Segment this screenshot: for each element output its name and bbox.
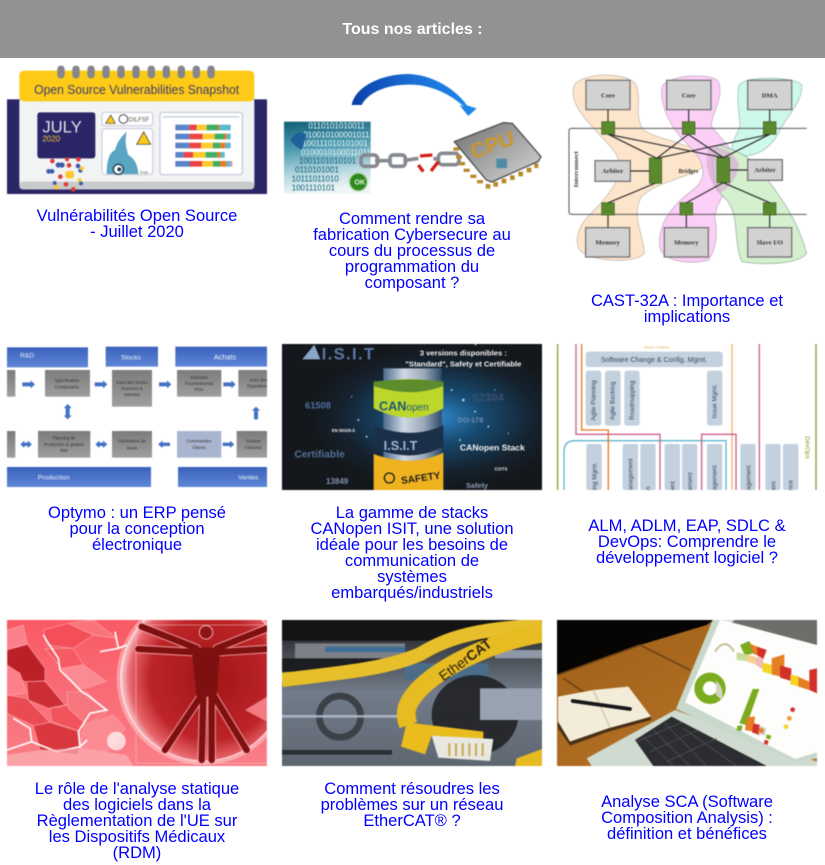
image: code chained to CPU xyxy=(283,73,542,194)
image: ERP process flow: Externes & xyxy=(121,386,143,391)
logo xyxy=(302,345,320,359)
article title: CANopen ISIT, une solution xyxy=(310,519,514,538)
image: ERP process flow: BW xyxy=(61,448,68,453)
article title xyxy=(310,503,514,602)
chain xyxy=(361,153,459,166)
image: EtherCAT yellow cable xyxy=(281,619,543,767)
image: code chained to CPU: 010010100001011 1 xyxy=(303,130,377,139)
article title: électronique xyxy=(92,535,182,554)
article title: problèmes sur un réseau xyxy=(321,795,503,814)
notebook xyxy=(558,687,651,742)
article title: CAST-32A : Importance et xyxy=(591,291,783,310)
image: interconnect architecture diagram: Memory xyxy=(674,239,699,246)
article title: Comment rendre sa xyxy=(339,209,485,228)
article title xyxy=(313,209,511,292)
image: interconnect architecture diagram: Arbiter xyxy=(754,167,776,174)
image: CANopen stacks poster: I.S.I.T xyxy=(384,439,418,453)
panel: article Vulnérabilités Open Source xyxy=(6,65,268,241)
article title: (RDM) xyxy=(113,843,161,862)
image: interconnect architecture diagram: Memory xyxy=(595,239,621,246)
article title: embarqués/industriels xyxy=(331,583,493,602)
sphere xyxy=(117,592,290,765)
panel: article analyse statique RDM xyxy=(6,619,268,862)
article title: systèmes xyxy=(377,567,447,586)
image: interconnect architecture diagram: Core xyxy=(682,92,696,99)
image: ERP process flow: Suivi des Stocks xyxy=(116,380,148,385)
image: ERP process flow: Stocks xyxy=(121,354,142,361)
image: CANopen stacks poster: 3 versions disponibles : xyxy=(420,348,507,357)
image: ALM ADLM diagram: Software Change & Config. Mgmt. xyxy=(601,357,707,364)
ring: CANopen xyxy=(374,379,443,418)
image: EtherCAT yellow cable: EtherCAT xyxy=(436,635,495,684)
article title xyxy=(321,779,503,830)
image: interconnect architecture diagram: DMA xyxy=(762,92,778,99)
image: ERP process flow: Générateur de xyxy=(118,439,147,444)
image: open source vulnerabilities calendar: Snyk xyxy=(140,171,148,175)
image: CANopen stacks poster: EN 50325-5 xyxy=(332,428,355,433)
image: ALM ADLM diagram: n xyxy=(645,486,652,490)
article title: Comment résoudres les xyxy=(324,779,500,798)
image: CANopen stacks poster: 62304 xyxy=(472,392,505,404)
image: CANopen stacks poster: Certifiable xyxy=(294,449,345,460)
image: ERP process flow: Suivi des xyxy=(250,378,267,383)
ring: ISIT xyxy=(375,425,443,455)
image: ERP process flow: Composants xyxy=(55,384,79,389)
panel: article CAST-32A xyxy=(568,74,808,326)
image: open source vulnerabilities calendar: 2020 xyxy=(42,135,61,144)
article title: Règlementation de l'UE sur xyxy=(37,811,237,830)
article title: - Juillet 2020 xyxy=(90,222,184,241)
image: ALM ADLM diagram: ement xyxy=(687,472,694,490)
panel: article EtherCAT xyxy=(281,619,543,830)
image: ERP process flow xyxy=(6,346,268,488)
image: CANopen stacks poster: Safety xyxy=(466,481,489,490)
article title: Vulnérabilités Open Source xyxy=(37,206,237,225)
article title: idéale pour les besoins de xyxy=(316,535,508,554)
image: ALM ADLM diagram: ing Mgmt. xyxy=(592,462,599,490)
image: ERP process flow: Production & gestion xyxy=(44,442,85,447)
article title xyxy=(35,779,239,862)
image: open source vulnerabilities calendar: DILFSF xyxy=(129,117,150,123)
image: ERP process flow: Gestion xyxy=(246,438,261,443)
image: code chained to CPU: CPU xyxy=(467,126,518,164)
article title: implications xyxy=(644,307,730,326)
image: interconnect architecture diagram: Bridges xyxy=(678,169,699,175)
title: Tous nos articles : xyxy=(342,21,483,38)
article title: composant ? xyxy=(365,273,459,292)
article title: DevOps: Comprendre le xyxy=(598,532,776,551)
title xyxy=(0,0,825,58)
green region xyxy=(712,145,807,264)
image: code chained to CPU: 1001110101 xyxy=(292,184,336,193)
image: ALM ADLM diagram: Agile Planning xyxy=(591,380,598,421)
image: ERP process flow: Sélection xyxy=(190,375,208,380)
image: ALM ADLM diagram: ent xyxy=(670,481,677,490)
image: ALM ADLM diagram: anagement xyxy=(628,458,635,490)
image: interconnect architecture diagram: Core xyxy=(601,92,615,99)
panel: article CANopen ISIT xyxy=(281,343,543,602)
hexagons xyxy=(7,620,125,755)
image: ERP process flow: R&D xyxy=(20,353,34,360)
laptop screen xyxy=(676,620,817,762)
article title: La gamme de stacks xyxy=(336,503,488,522)
article title: Optymo : un ERP pensé xyxy=(48,503,226,522)
article title xyxy=(601,792,773,843)
article title xyxy=(48,503,226,554)
image: ALM ADLM diagram xyxy=(556,343,818,491)
image: ERP process flow: Production xyxy=(38,474,70,481)
image: ALM ADLM diagram: ent xyxy=(770,481,777,490)
CPU chip xyxy=(453,147,538,189)
image: ERP process flow: Ventes xyxy=(238,474,259,481)
image: code chained to CPU: 100111010101001 0 xyxy=(302,139,375,148)
article title: pour la conception xyxy=(69,519,205,538)
article title: les Dispositifs Médicaux xyxy=(49,827,225,846)
article title: définition et bénéfices xyxy=(607,824,767,843)
image: code chained to CPU: 10111011010 xyxy=(292,174,339,183)
image: code chained to CPU: 0110101001 xyxy=(295,166,339,175)
image: open source vulnerabilities calendar: JULY xyxy=(42,117,82,136)
ring: Safety xyxy=(374,453,443,490)
image: ERP process flow: Fournisseurs& xyxy=(185,381,213,386)
image: ERP process flow: Internes xyxy=(124,392,140,397)
image: open source vulnerabilities calendar xyxy=(6,65,268,195)
image: interconnect architecture diagram: Slave I/O xyxy=(756,239,783,246)
image: ERP process flow: POs xyxy=(195,387,203,392)
article title: Le rôle de l'analyse statique xyxy=(35,779,239,798)
image: code chained to CPU: 1001101010101 xyxy=(299,157,357,166)
article title: développement logiciel ? xyxy=(596,548,778,567)
image: CANopen stacks poster xyxy=(281,343,543,491)
image: interconnect architecture diagram xyxy=(568,74,808,265)
panel: article fabrication Cybersecure xyxy=(283,73,542,292)
laptop base xyxy=(587,710,817,766)
image: CANopen stacks poster: 13849 xyxy=(326,477,349,486)
image: ERP process flow: Achats xyxy=(214,353,237,362)
article title: des logiciels dans la xyxy=(63,795,211,814)
article title: fabrication Cybersecure au xyxy=(313,225,511,244)
image: laptop with dashboard on wooden desk xyxy=(556,619,818,767)
image: ERP process flow: Factures xyxy=(245,445,262,450)
article title xyxy=(588,516,786,567)
connector xyxy=(401,722,483,754)
image: ALM ADLM diagram: Roadmapping xyxy=(629,380,636,420)
figure xyxy=(138,627,267,760)
image: CANopen stacks poster: CANopen xyxy=(379,400,429,414)
arrow xyxy=(352,74,477,116)
orange region xyxy=(573,75,706,260)
image: CANopen stacks poster: SAFETY xyxy=(401,471,441,487)
cable xyxy=(282,626,542,680)
article title: ALM, ADLM, EAP, SDLC & xyxy=(588,516,786,535)
image: CANopen stacks poster: COTS xyxy=(495,466,507,471)
image: CANopen stacks poster: I.S.I.T xyxy=(322,344,375,363)
image: ERP process flow: Devis xyxy=(127,445,137,450)
image: ERP process flow: Commandes xyxy=(187,438,211,443)
article title: programmation du xyxy=(345,257,479,276)
article title: Analyse SCA (Software xyxy=(601,792,773,811)
article title xyxy=(591,291,783,326)
panel: article Analyse SCA xyxy=(556,619,818,843)
image: CANopen stacks poster: DO-178 xyxy=(458,416,483,425)
image: ALM ADLM diagram: DevOps xyxy=(803,436,810,459)
image: ALM ADLM diagram: Scrum, Kanban xyxy=(644,345,669,349)
image: code chained to CPU: OK xyxy=(354,178,366,187)
article title: Composition Analysis) : xyxy=(601,808,773,827)
teal region xyxy=(732,78,802,156)
image: open source vulnerabilities calendar: Open Source Vulnerabilities Snapshot xyxy=(34,83,240,97)
image: CANopen stacks poster: "Standard", Safety et Certifiable xyxy=(405,360,521,369)
pink region xyxy=(660,76,737,262)
article title: communication de xyxy=(345,551,479,570)
image: ALM ADLM diagram: agement xyxy=(745,465,752,490)
article title: EtherCAT® ? xyxy=(363,811,461,830)
image: ALM ADLM diagram: Issue Mgmt. xyxy=(712,384,719,418)
panel: article ALM ADLM xyxy=(556,343,818,567)
image: code chained to CPU: 0100010100011011 xyxy=(301,148,372,157)
image: CANopen stacks poster: CANopen Stack xyxy=(460,443,525,453)
article title: cours du processus de xyxy=(329,241,495,260)
image: interconnect architecture diagram: Arbiter xyxy=(602,168,623,175)
image: ERP process flow: Clients xyxy=(192,445,206,450)
image: Vitruvian man on red background xyxy=(6,619,268,767)
image: ALM ADLM diagram: nce xyxy=(788,479,795,490)
article title xyxy=(36,206,237,241)
image: code chained to CPU: 0110101010011 xyxy=(308,121,366,130)
image: interconnect architecture diagram: Interconnect xyxy=(573,150,580,187)
image: CANopen stacks poster: 61508 xyxy=(305,400,331,410)
image: ALM ADLM diagram: agement xyxy=(712,465,719,490)
panel: article Optymo xyxy=(6,346,268,554)
image: ERP process flow: Spécification xyxy=(55,378,80,383)
dashboard xyxy=(740,641,757,656)
image: ERP process flow: Planning de xyxy=(53,435,76,440)
image: ALM ADLM diagram: Agile Backlog xyxy=(610,381,617,420)
